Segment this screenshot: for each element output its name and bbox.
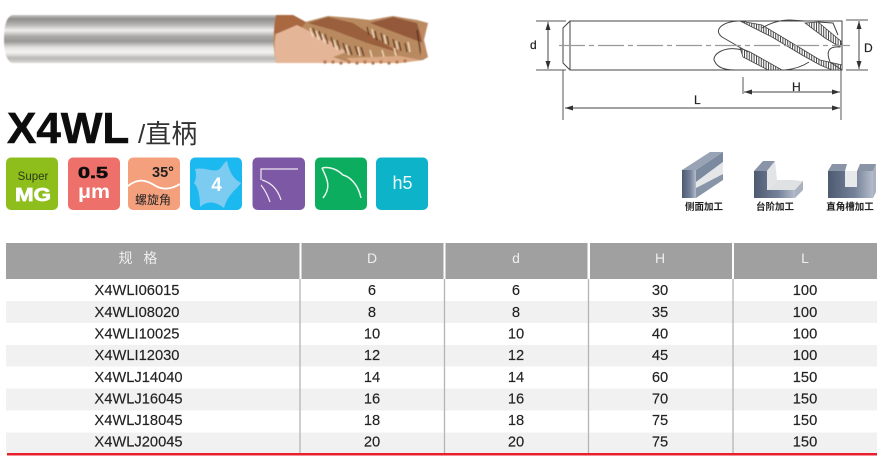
title: X4WL (7, 104, 129, 153)
title (7, 104, 197, 153)
table data: 100 (793, 326, 817, 342)
table data: 40 (652, 326, 668, 342)
title: /直柄 (138, 119, 197, 149)
icon: corner geometry (252, 158, 305, 210)
icon: flute profile (315, 158, 367, 210)
table data: 10 (508, 326, 524, 342)
table data: X4WLI06015 (95, 283, 179, 299)
table data: 30 (652, 283, 668, 299)
icon: 35° helix angle (128, 158, 180, 210)
table data: 150 (793, 392, 817, 408)
dimension labels: L (694, 93, 701, 107)
table header: D (367, 250, 377, 266)
table data: 18 (508, 413, 524, 429)
table data: X4WLJ18045 (94, 413, 183, 429)
table data: 150 (793, 370, 817, 386)
table data: 35 (652, 305, 668, 321)
table data: X4WLJ16045 (94, 392, 183, 408)
table data: 45 (652, 348, 668, 364)
table data: 70 (652, 392, 668, 408)
icon: slot milling (826, 164, 876, 213)
icon: h5 tolerance: h5 (392, 173, 413, 193)
technical drawing (530, 20, 873, 120)
icon: Super MG: MG (15, 185, 51, 205)
table header (6, 243, 877, 279)
icon: Super MG (6, 158, 58, 210)
icon: 35° helix angle: 35° (152, 165, 174, 181)
feature icons (6, 158, 428, 210)
table data: 150 (793, 413, 817, 429)
table data: 100 (793, 283, 817, 299)
dimension arrows (546, 21, 862, 110)
table row stripes (6, 301, 877, 453)
table data: 8 (512, 305, 520, 321)
icon: shoulder milling: 台阶加工 (756, 201, 794, 213)
table data: 16 (364, 392, 380, 408)
icon: 4 flutes: 4 (211, 175, 222, 196)
table data: X4WLJ14040 (94, 370, 183, 386)
table data: 14 (508, 370, 524, 386)
table column dividers (300, 279, 733, 453)
table data: X4WLI10025 (95, 326, 179, 342)
table data: 20 (508, 434, 524, 450)
table data: 20 (364, 434, 380, 450)
dimension labels: H (792, 80, 801, 94)
table bottom red rule (7, 453, 877, 456)
tool outline (563, 21, 842, 70)
table data: 100 (793, 348, 817, 364)
icon: grain size 0.5 µm: 0.5 (78, 165, 108, 182)
table data: 75 (652, 413, 668, 429)
dimension labels (530, 38, 873, 107)
dimension labels: D (864, 41, 873, 55)
table data: 100 (793, 305, 817, 321)
table data: X4WLI08020 (95, 305, 179, 321)
table header: 规 格 (119, 250, 157, 266)
icon: side milling (682, 152, 723, 213)
table data: X4WLI12030 (95, 348, 179, 364)
table header: L (801, 250, 809, 266)
table data: 16 (508, 392, 524, 408)
table data: 6 (512, 283, 520, 299)
icon: grain size 0.5 µm: μm (78, 182, 110, 203)
table data (94, 283, 817, 450)
icon: h5 tolerance (376, 158, 428, 210)
table data: 60 (652, 370, 668, 386)
table data: 10 (364, 326, 380, 342)
table data: 12 (508, 348, 524, 364)
dimension labels: d (530, 38, 537, 52)
product photo: end mill (4, 15, 428, 65)
table data: 8 (368, 305, 376, 321)
flute curves (714, 20, 842, 70)
icon: side milling: 侧面加工 (685, 201, 723, 213)
table data: 6 (368, 283, 376, 299)
icon: 35° helix angle: 螺旋角 (135, 193, 171, 207)
table header: H (655, 250, 665, 266)
icon: Super MG: Super (18, 171, 49, 183)
machining type icons (682, 152, 876, 213)
table data: X4WLJ20045 (94, 434, 183, 450)
extension lines (536, 20, 868, 120)
table data: 14 (364, 370, 380, 386)
icon: shoulder milling (754, 161, 803, 213)
icon: grain size 0.5 µm (68, 158, 120, 210)
table data: 12 (364, 348, 380, 364)
icon: slot milling: 直角槽加工 (826, 201, 874, 213)
table data: 18 (364, 413, 380, 429)
flute hatching (740, 21, 842, 70)
table data: 150 (793, 434, 817, 450)
icon: 4 flutes (190, 158, 242, 210)
table data: 75 (652, 434, 668, 450)
centre line (559, 44, 850, 46)
specification table (6, 243, 877, 456)
table header: d (512, 250, 520, 266)
